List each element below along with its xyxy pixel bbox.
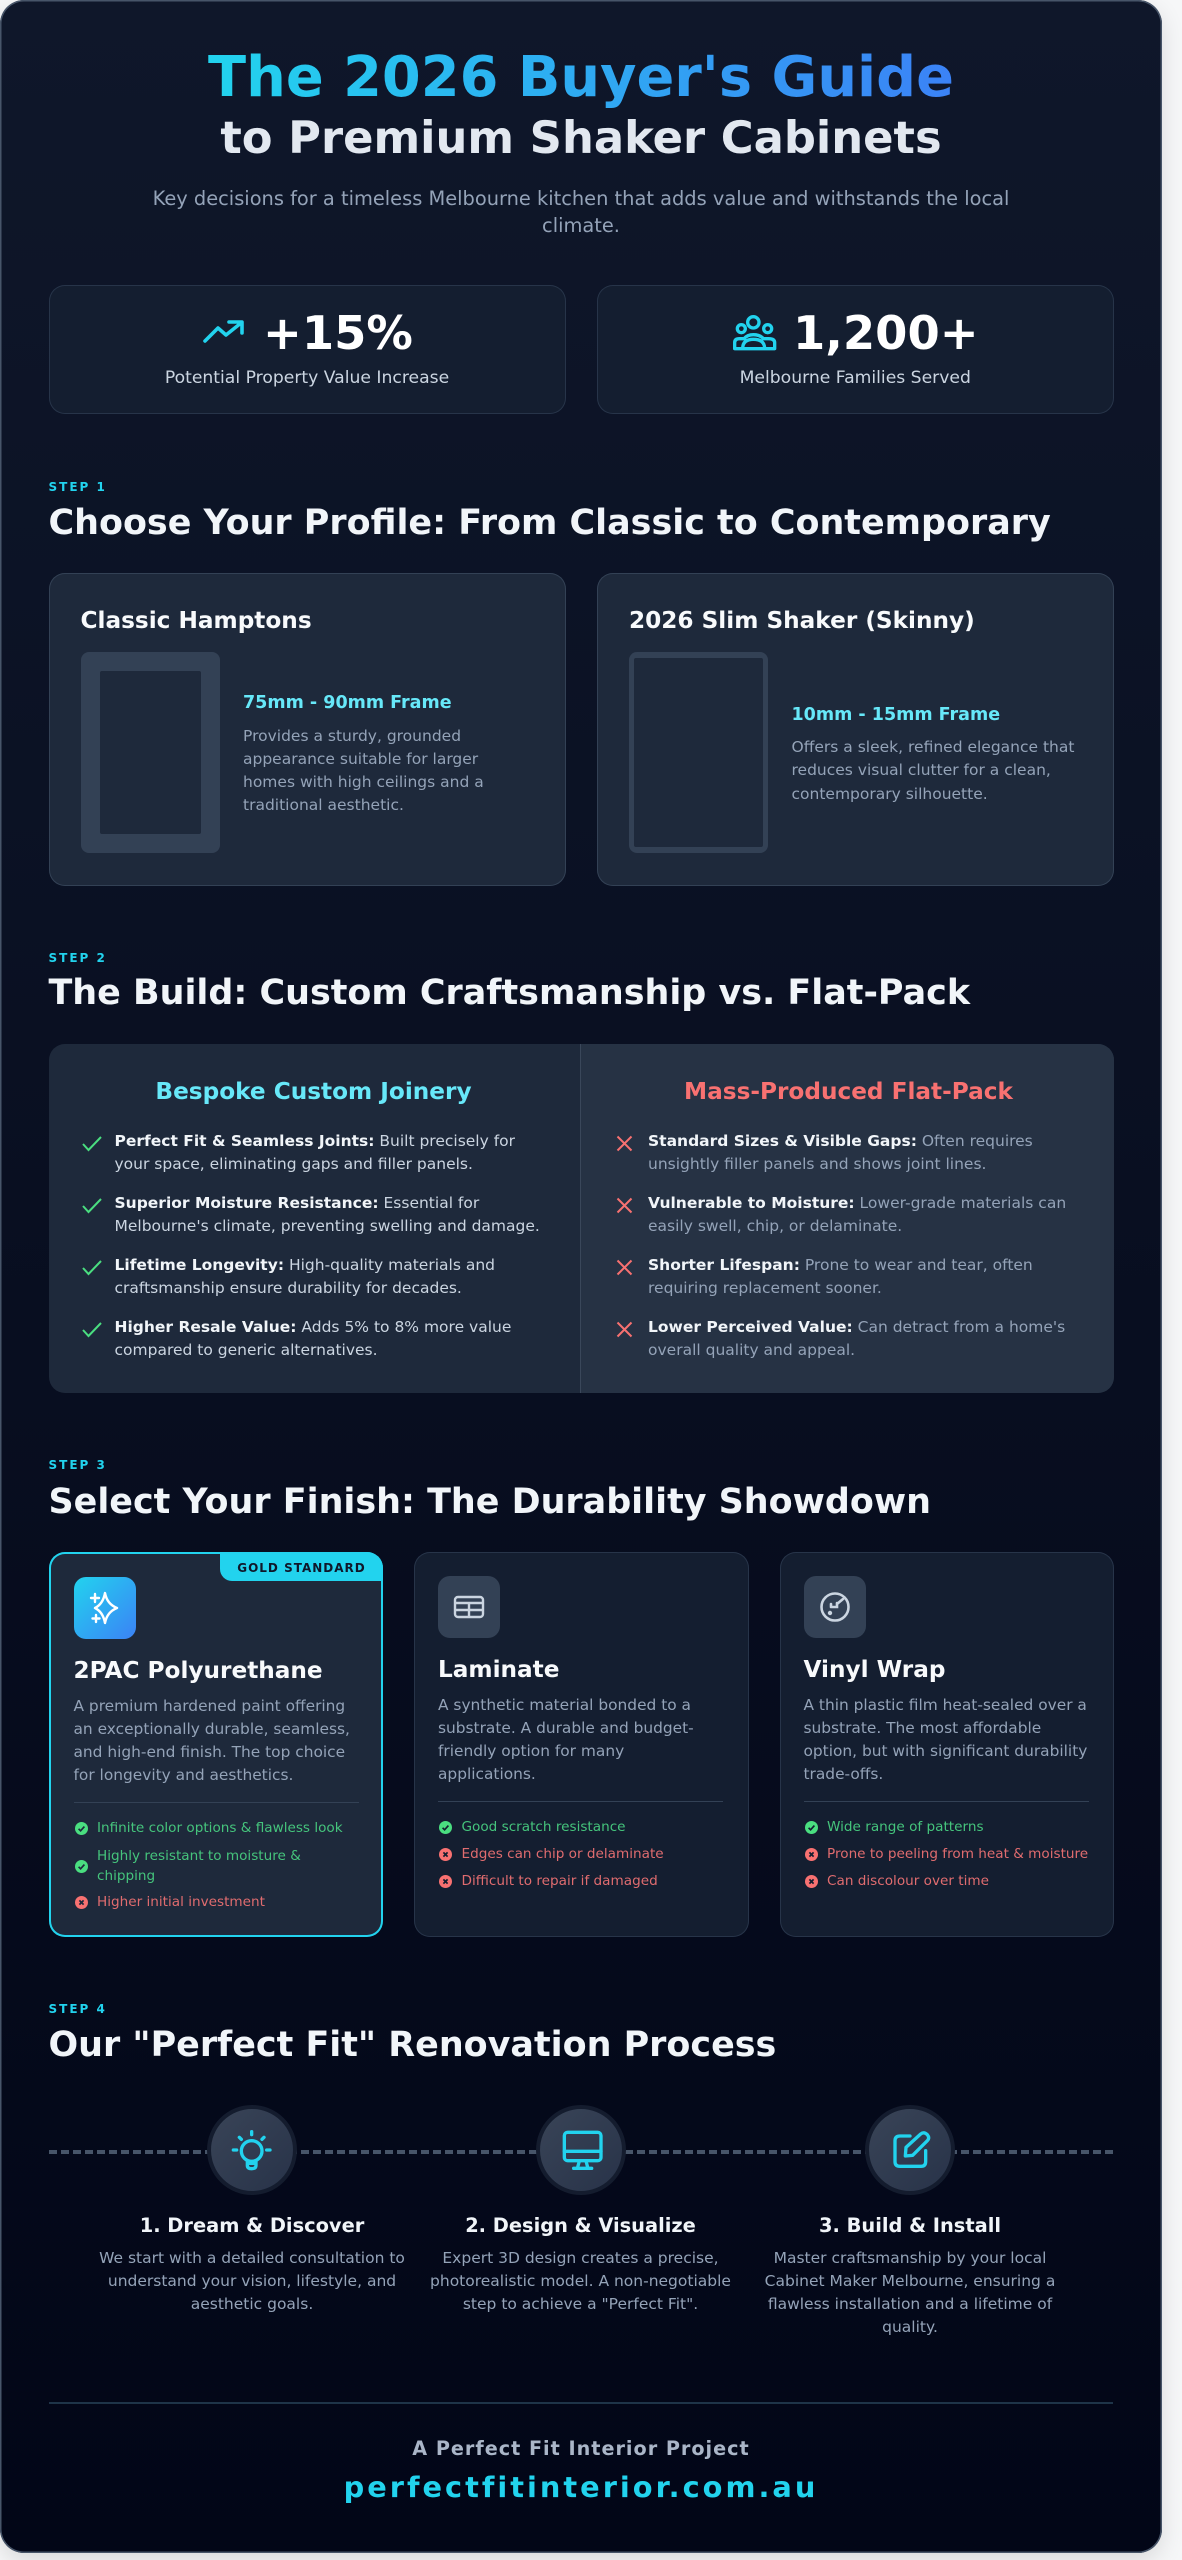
- eyebrow: STEP 4: [48, 2002, 107, 2016]
- con: Difficult to repair if damaged: [462, 1873, 658, 1889]
- description: an exceptionally durable, seamless,: [74, 1720, 350, 1738]
- stat: families served: [597, 285, 1114, 414]
- pro, two lines: [75, 1848, 301, 1884]
- description: substrate. A durable and budget-: [438, 1719, 694, 1737]
- badge: [220, 1552, 383, 1581]
- icon: light bulb: [232, 2130, 272, 2170]
- divider: [438, 1801, 723, 1802]
- description: [243, 726, 484, 814]
- pro: Good scratch resistance: [462, 1819, 626, 1835]
- process step 3: [765, 2105, 1055, 2336]
- stat label: Potential Property Value Increase: [165, 368, 449, 388]
- section heading: step 2: [48, 951, 971, 1013]
- con item 2: easily swell, chip, or delaminate.: [648, 1217, 902, 1235]
- panel: laminate: [414, 1552, 748, 1937]
- pro: Infinite color options & flawless look: [97, 1820, 343, 1836]
- footer rule: [49, 2402, 1113, 2404]
- stat number: +15%: [263, 306, 413, 360]
- description: Provides a sturdy, grounded: [243, 726, 461, 744]
- con item 1: Standard Sizes & Visible Gaps: Often requires: [648, 1132, 1033, 1150]
- diagram: thick frame: [80, 652, 220, 853]
- divider: [74, 1802, 358, 1803]
- step description: understand your vision, lifestyle, and: [108, 2272, 396, 2290]
- panel: slim shaker: [597, 573, 1114, 886]
- description: substrate. The most affordable: [804, 1719, 1041, 1737]
- step description: [430, 2248, 731, 2313]
- subtitle: [153, 187, 1009, 237]
- diagram: slim frame: [629, 652, 768, 853]
- con item 3: requiring replacement sooner.: [648, 1279, 882, 1297]
- right column background: [580, 1044, 1114, 1393]
- pro: Wide range of patterns: [827, 1819, 984, 1835]
- step description: Master craftsmanship by your local: [774, 2248, 1046, 2266]
- process step 1: [99, 2105, 405, 2313]
- con: Higher initial investment: [97, 1894, 265, 1910]
- card title: Laminate: [438, 1656, 560, 1683]
- description: and high-end finish. The top choice: [74, 1743, 345, 1761]
- stat: property value: [48, 285, 566, 414]
- description: A thin plastic film heat-sealed over a: [804, 1696, 1087, 1714]
- card title: Classic Hamptons: [80, 607, 312, 634]
- con item 3: Shorter Lifespan: Prone to wear and tear, often: [648, 1256, 1033, 1274]
- column title: flat-pack: Mass-Produced Flat-Pack: [684, 1078, 1013, 1105]
- pro item 1: [82, 1132, 515, 1173]
- title line 1: The 2026 Buyer's Guide: [208, 45, 954, 110]
- stat number: 1,200+: [793, 306, 979, 360]
- eyebrow: STEP 3: [48, 1458, 107, 1472]
- section heading: step 3: [48, 1458, 931, 1522]
- column title: bespoke: Bespoke Custom Joinery: [155, 1078, 472, 1105]
- pro item 1: your space, eliminating gaps and filler panels.: [114, 1155, 473, 1173]
- step description: Cabinet Maker Melbourne, ensuring a: [765, 2272, 1055, 2290]
- pro item 4: [82, 1318, 511, 1359]
- description: A premium hardened paint offering: [74, 1696, 345, 1714]
- description: appearance suitable for larger: [243, 750, 478, 768]
- icon: laminate table: [438, 1576, 500, 1638]
- con item 3: [616, 1256, 1033, 1297]
- con item 4: overall quality and appeal.: [648, 1341, 855, 1359]
- step description: We start with a detailed consultation to: [99, 2248, 405, 2266]
- con: Prone to peeling from heat & moisture: [827, 1846, 1088, 1862]
- description: applications.: [438, 1765, 536, 1783]
- step description: photorealistic model. A non-negotiable: [430, 2272, 731, 2290]
- step title: 1. Dream & Discover: [140, 2214, 364, 2237]
- description: trade-offs.: [804, 1765, 883, 1783]
- icon circle: [207, 2105, 297, 2195]
- stat label: Melbourne Families Served: [740, 368, 971, 388]
- con item 1: unsightly filler panels and shows joint lines.: [648, 1155, 986, 1173]
- step description: aesthetic goals.: [191, 2295, 313, 2313]
- con item 2: [616, 1194, 1066, 1235]
- description: Offers a sleek, refined elegance that: [792, 738, 1074, 756]
- pro item 2: Melbourne's climate, preventing swelling and damage.: [114, 1217, 540, 1235]
- description: for longevity and aesthetics.: [74, 1766, 293, 1784]
- pro item 2: [82, 1194, 540, 1235]
- con: Edges can chip or delaminate: [462, 1846, 664, 1862]
- frame size: 10mm - 15mm Frame: [792, 705, 1000, 725]
- description: option, but with significant durability: [804, 1742, 1087, 1760]
- description: A synthetic material bonded to a: [438, 1696, 691, 1714]
- heading: Select Your Finish: The Durability Showdown: [48, 1482, 931, 1522]
- header: [153, 45, 1009, 237]
- con item 2: Vulnerable to Moisture: Lower-grade materials can: [648, 1194, 1066, 1212]
- con item 4: [616, 1318, 1065, 1359]
- pro item 3: craftsmanship ensure durability for decades.: [114, 1279, 462, 1297]
- panel: classic hamptons: [48, 573, 566, 886]
- step title: 2. Design & Visualize: [465, 2214, 696, 2237]
- footer tagline: A Perfect Fit Interior Project: [412, 2437, 750, 2460]
- step description: [765, 2248, 1055, 2336]
- step description: [99, 2248, 405, 2313]
- con: Can discolour over time: [827, 1873, 989, 1889]
- icon: sparkles: [74, 1577, 136, 1639]
- card title: Vinyl Wrap: [804, 1656, 945, 1683]
- divider: [804, 1801, 1088, 1802]
- subtitle: Key decisions for a timeless Melbourne kitchen that adds value and withstands the local: [153, 187, 1009, 210]
- description: homes with high ceilings and a: [243, 773, 484, 791]
- icon: monitor: [562, 2130, 603, 2170]
- con item 1: [616, 1132, 1033, 1173]
- frame size: 75mm - 90mm Frame: [243, 693, 452, 713]
- footer: [49, 2402, 1113, 2512]
- heading: The Build: Custom Craftsmanship vs. Flat-Pack: [48, 973, 970, 1013]
- step description: flawless installation and a lifetime of: [768, 2295, 1052, 2313]
- eyebrow: STEP 2: [48, 951, 107, 965]
- pro item 4: compared to generic alternatives.: [114, 1341, 378, 1359]
- icon circle: [865, 2105, 955, 2195]
- pro item 2: Superior Moisture Resistance: Essential for: [114, 1194, 479, 1212]
- badge: GOLD STANDARD: [237, 1561, 366, 1575]
- step description: Expert 3D design creates a precise,: [442, 2248, 719, 2266]
- pro item 3: [82, 1256, 495, 1297]
- process step 2: [430, 2105, 731, 2313]
- icon: trending up: [203, 320, 244, 343]
- panel: comparison table: [48, 1044, 1114, 1393]
- subtitle: climate.: [542, 214, 620, 237]
- description: reduces visual clutter for a clean,: [792, 761, 1051, 779]
- step description: step to achieve a "Perfect Fit".: [463, 2295, 698, 2313]
- icon: vinyl dial: [804, 1576, 866, 1638]
- pro item 4: Higher Resale Value: Adds 5% to 8% more value: [114, 1318, 511, 1336]
- pro item 3: Lifetime Longevity: High-quality materials and: [114, 1256, 495, 1274]
- dashed process connector: [49, 2150, 1113, 2154]
- card title: 2PAC Polyurethane: [74, 1657, 323, 1684]
- description: [804, 1696, 1087, 1783]
- step title: 3. Build & Install: [819, 2214, 1001, 2237]
- heading: Our "Perfect Fit" Renovation Process: [48, 2025, 776, 2065]
- description: [792, 738, 1074, 803]
- eyebrow: STEP 1: [48, 480, 107, 494]
- description: traditional aesthetic.: [243, 796, 404, 814]
- pro, two lines: chipping: [97, 1868, 155, 1884]
- icon: pencil square: [893, 2131, 930, 2168]
- pro item 1: Perfect Fit & Seamless Joints: Built precisely for: [114, 1132, 515, 1150]
- con item 4: Lower Perceived Value: Can detract from a home's: [648, 1318, 1065, 1336]
- description: friendly option for many: [438, 1742, 624, 1760]
- description: [438, 1696, 694, 1783]
- panel: 2PAC polyurethane: [48, 1552, 383, 1937]
- description: contemporary silhouette.: [792, 785, 988, 803]
- card title: 2026 Slim Shaker (Skinny): [629, 607, 975, 634]
- icon circle: [536, 2105, 626, 2195]
- description: [74, 1696, 350, 1784]
- footer url: perfectfitinterior.com.au: [344, 2470, 818, 2504]
- panel: vinyl wrap: [780, 1552, 1114, 1937]
- section heading: step 4: [48, 2002, 776, 2065]
- section heading: step 1: [48, 480, 1051, 543]
- title line 2: to Premium Shaker Cabinets: [220, 111, 942, 164]
- heading: Choose Your Profile: From Classic to Contemporary: [48, 503, 1051, 543]
- pro, two lines: Highly resistant to moisture &: [97, 1848, 301, 1864]
- icon: group of people: [733, 315, 776, 350]
- step description: quality.: [882, 2318, 938, 2336]
